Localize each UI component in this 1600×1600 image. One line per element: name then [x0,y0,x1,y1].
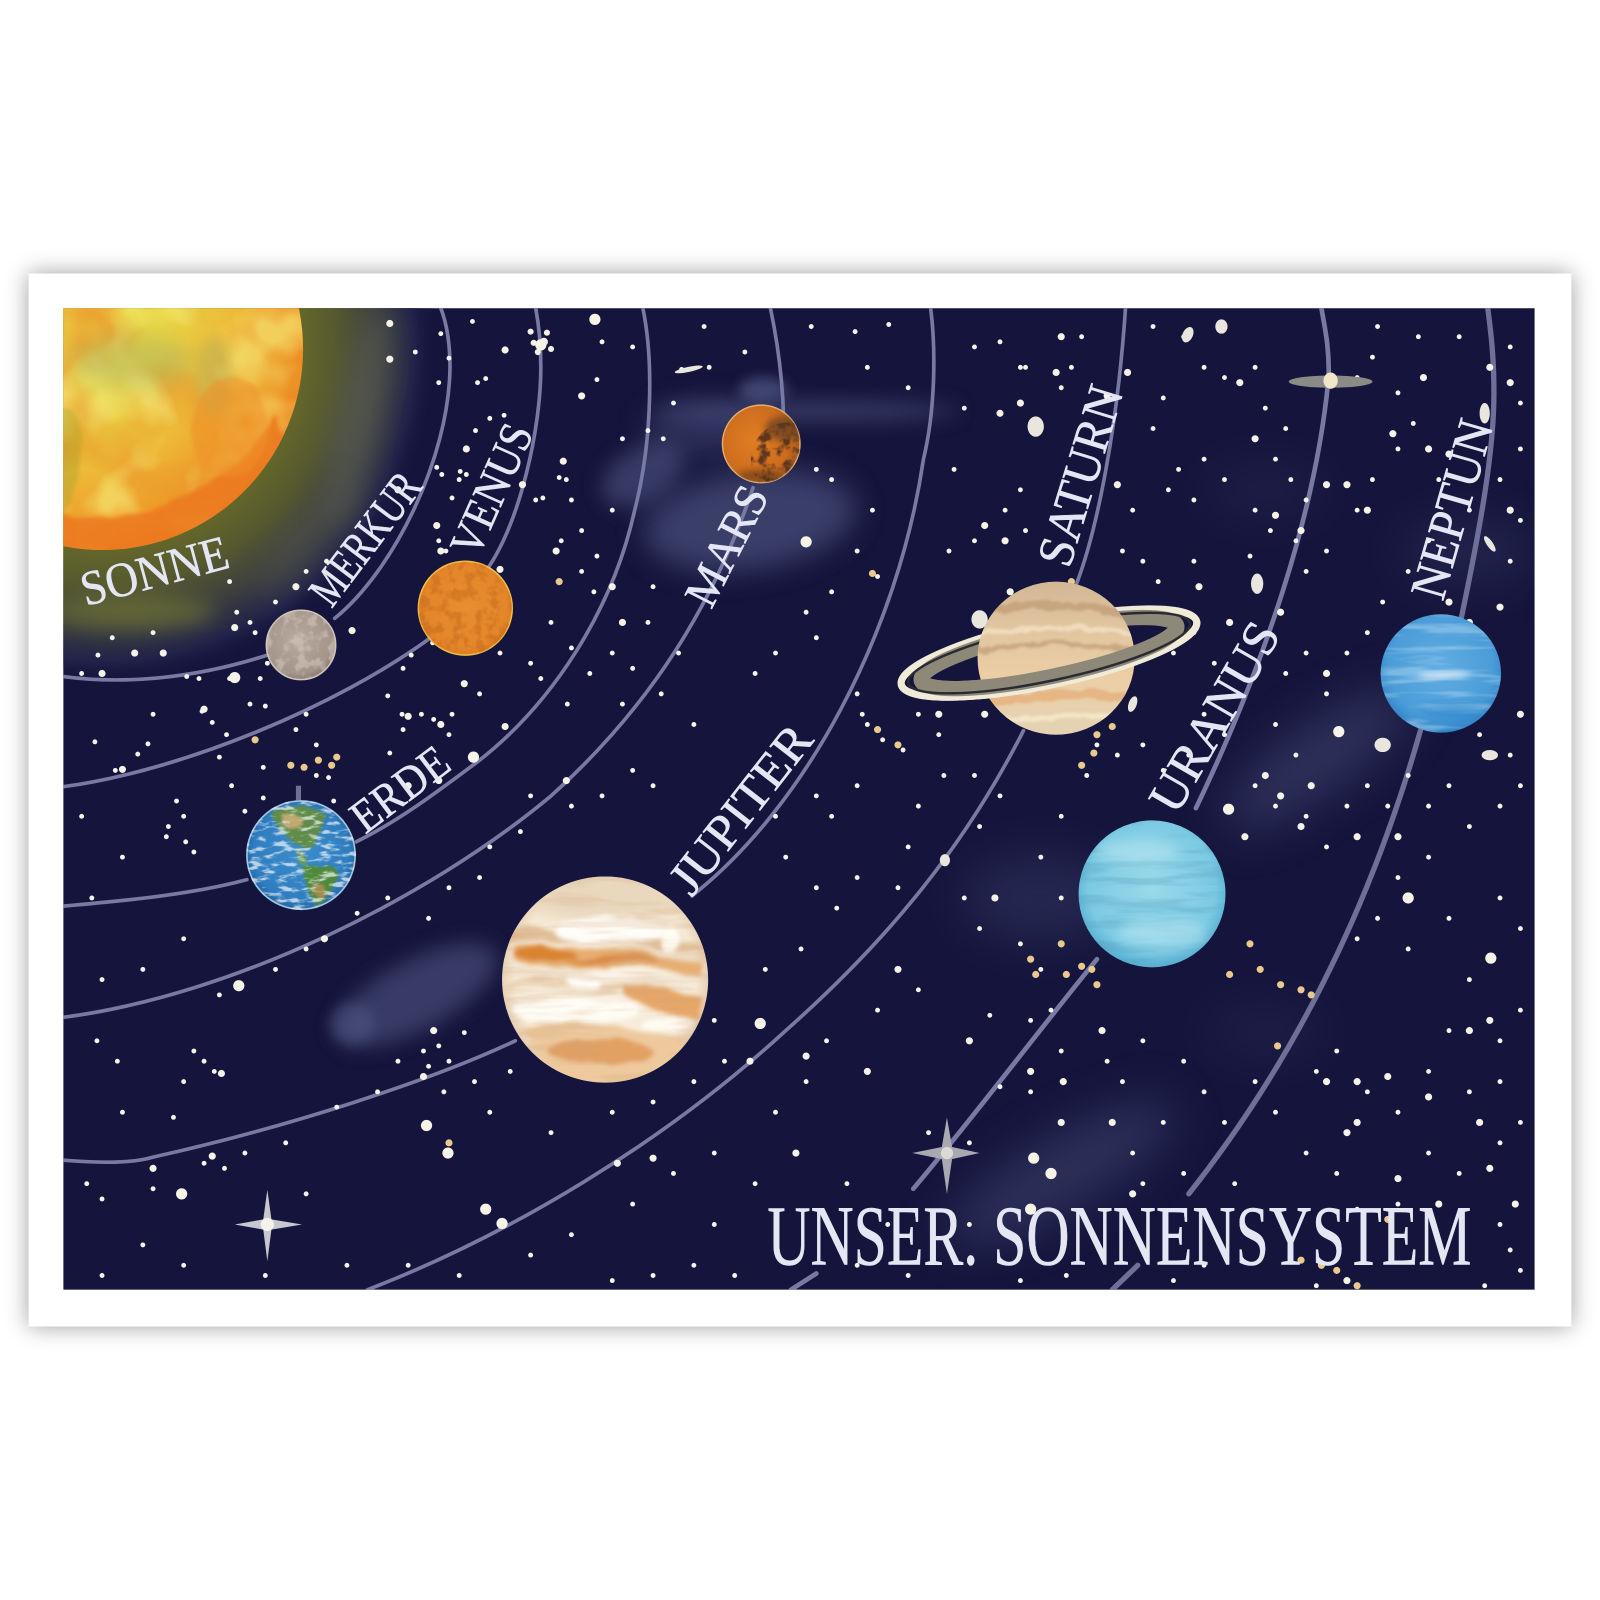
golden stars [255,573,1388,1286]
sparkle star: bottom centre [912,1117,980,1194]
label: Jupiter: JUPITER [657,713,824,905]
planet: Erde [246,786,356,910]
panel: night sky [63,308,1535,1290]
orbit: Merkur [63,308,450,680]
orbit: Mars [63,308,784,1017]
infographic: solar system poster [14,258,1586,1342]
planet: Saturn [895,582,1203,735]
moons [674,319,1498,866]
poster frame with shadow [29,273,1571,1327]
planet: Uranus [1079,820,1226,967]
sun [63,308,304,550]
planet: Merkur [266,610,336,680]
rings back [895,591,1203,715]
star cluster [528,329,554,355]
planet: Venus [418,561,512,655]
label: Neptun: NEPTUN [1401,413,1505,605]
label: Mars: MARS [675,477,779,615]
orbit: Jupiter [63,308,934,1162]
sparkle star: bottom left [235,1190,302,1261]
label: Uranus: URANUS [1138,612,1292,822]
label: Sonne: SONNE [74,525,234,617]
nebula clouds [321,377,1541,1272]
orbit: Uranus [791,308,1329,1290]
orbit lines [63,308,1494,1290]
orbit: Erde [63,308,650,906]
planet: Mars [722,405,824,496]
rings front [901,622,1203,715]
label: Merkur: MERKUR [299,462,433,616]
label: Venus: VENUS [440,416,544,564]
label: Saturn: SATURN [1027,379,1135,573]
medium stars [102,323,1520,1281]
sun glow [63,308,434,681]
star field [82,319,1520,1286]
orbit: Venus [63,308,541,787]
planet: Neptun [1381,614,1501,733]
orbit: Saturn [367,308,1126,1290]
label: Erde: ERDE [341,736,460,843]
planet: Jupiter [502,873,708,1083]
small ringed planet [1289,372,1372,389]
large stars [182,319,1491,1223]
orbit: Neptun [1112,308,1494,1290]
tiny stars [82,321,1520,1286]
